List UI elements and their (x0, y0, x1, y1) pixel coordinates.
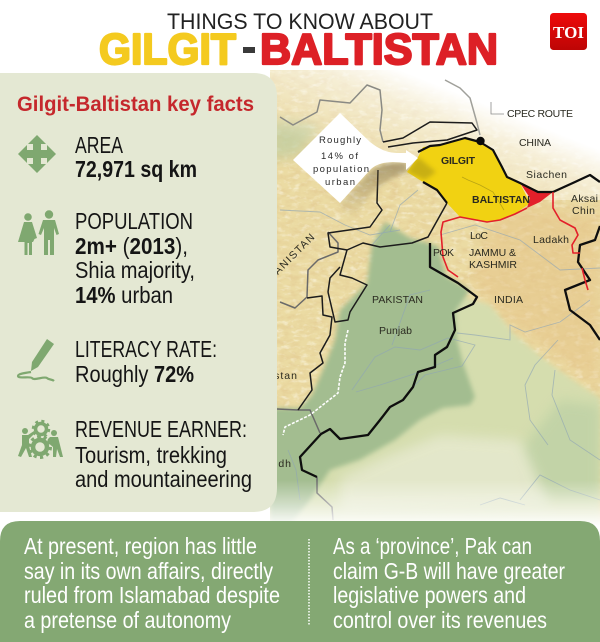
callout: 14% urban: population (313, 164, 369, 175)
callout: 14% urban: Roughly (319, 135, 361, 146)
rivers (280, 190, 600, 505)
map labels: KASHMIR (469, 259, 517, 271)
map labels: GILGIT (441, 155, 476, 167)
text: right statement: legislative powers and (333, 582, 526, 608)
text: area: AREA (75, 132, 123, 158)
map labels: Siachen (526, 169, 567, 181)
logo: TOI: TOI (553, 23, 584, 42)
map labels: LoC (470, 230, 488, 242)
text: area: 72,971 sq km (75, 156, 197, 182)
panel: bottom summary (0, 521, 600, 642)
text: population (75, 208, 195, 308)
region: Gilgit-Baltistan yellow (407, 138, 530, 222)
map labels: Chin (572, 205, 595, 217)
icon: pencil (18, 339, 54, 381)
callout: 14% urban (293, 113, 418, 203)
text: literacy: Roughly 72% (75, 361, 194, 387)
panel: key facts (0, 73, 277, 512)
icon: gears and workers (18, 421, 63, 458)
text: left statement: ruled from Islamabad despite (24, 582, 280, 608)
map labels: AFGHANISTAN (247, 231, 318, 301)
logo: TOI (550, 13, 587, 50)
title (99, 9, 498, 74)
map labels: Aksai (571, 193, 598, 205)
text: left statement (24, 533, 280, 633)
text: right statement (333, 533, 565, 633)
text: left statement: say in its own affairs, directly (24, 558, 273, 584)
text: right statement: claim G-B will have greater (333, 558, 565, 584)
map labels: CHINA (519, 137, 551, 149)
panel heading: Gilgit-Baltistan key facts (17, 93, 254, 116)
map labels: Punjab (379, 325, 412, 337)
text: right statement: As a ‘province’, Pak can (333, 533, 532, 559)
region: Siachen red (521, 184, 552, 208)
text: population: Shia majority, (75, 257, 195, 283)
text: revenue: Tourism, trekking (75, 442, 227, 468)
text: population: POPULATION (75, 208, 193, 234)
GB border and LoC (418, 138, 588, 290)
title: Gilgit: GILGIT (99, 25, 236, 74)
white dashed river line (283, 330, 348, 435)
borders (277, 80, 480, 520)
text: revenue: and mountaineering (75, 466, 252, 492)
marker: black dot (476, 137, 485, 145)
map labels: INDIA (494, 294, 523, 306)
text: right statement: control over its revenues (333, 607, 547, 633)
map labels: Balochistan (233, 370, 298, 382)
map labels: PAKISTAN (372, 294, 423, 306)
text: revenue (75, 416, 252, 492)
callout: 14% urban: 14% of (321, 151, 358, 162)
map (270, 70, 600, 522)
text: population: 2m+ (2013), (75, 233, 188, 259)
icon: area arrows (18, 135, 56, 173)
text: revenue: REVENUE EARNER: (75, 416, 247, 442)
map labels: Ladakh (533, 234, 569, 246)
text: literacy: LITERACY RATE: (75, 336, 217, 362)
text: area (75, 132, 197, 182)
icon: people (18, 210, 59, 255)
map labels: POK (433, 247, 454, 259)
title line one: THINGS TO KNOW ABOUT (167, 9, 433, 34)
map labels: JAMMU & (469, 247, 516, 259)
callout: 14% urban: urban (325, 177, 355, 188)
CPEC marker leader (491, 102, 504, 114)
map labels: BALTISTAN (472, 194, 530, 206)
title: Baltistan: BALTISTAN (260, 25, 498, 74)
callout shadow (340, 163, 407, 218)
map labels: CPEC ROUTE (507, 108, 573, 120)
map labels (277, 110, 598, 467)
text: left statement: a pretense of autonomy (24, 607, 231, 633)
text: left statement: At present, region has little (24, 533, 257, 559)
text: population: 14% urban (75, 282, 173, 308)
text: literacy (75, 336, 217, 387)
map labels: Sindh (260, 458, 292, 470)
title: hyphen (243, 47, 255, 53)
